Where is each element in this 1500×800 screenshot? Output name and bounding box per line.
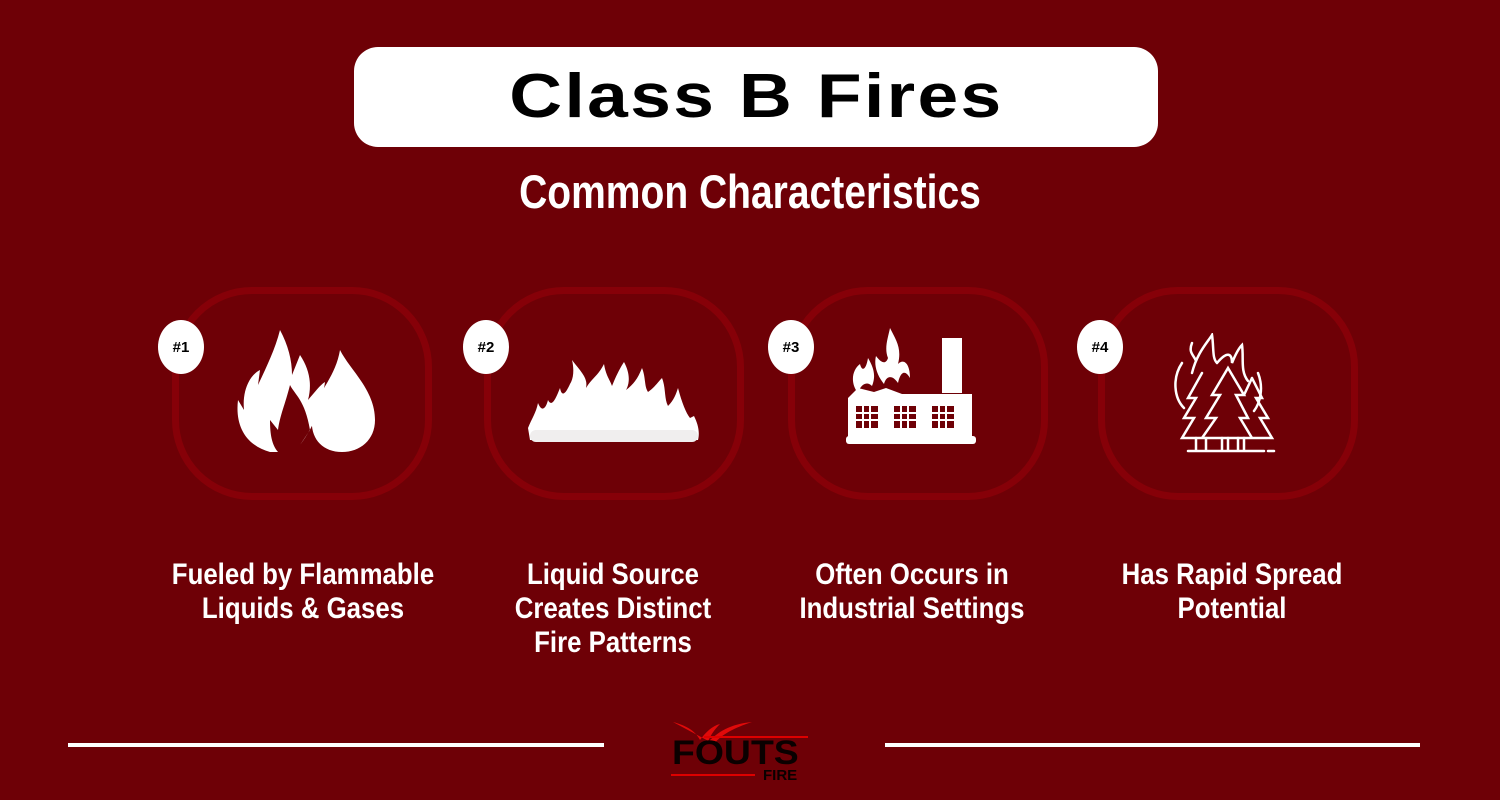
label 1: Liquids & Gases — [202, 592, 404, 625]
label 3: Industrial Settings — [799, 592, 1025, 625]
icon: liquid fire — [528, 360, 699, 442]
logo: FOUTS — [672, 734, 799, 772]
badge 3: #3 — [783, 338, 799, 356]
icon: flame and drop — [238, 330, 375, 452]
badge 2 — [463, 320, 509, 374]
label 2: Liquid Source — [527, 558, 699, 591]
label 3 — [799, 558, 1025, 625]
label 1: Fueled by Flammable — [172, 558, 434, 591]
badge 1: #1 — [173, 338, 189, 356]
label 3: Often Occurs in — [815, 558, 1009, 591]
logo: FIRE — [763, 767, 797, 784]
badge 4 — [1077, 320, 1123, 374]
card 1 — [172, 287, 432, 500]
footer line left — [68, 743, 604, 747]
icon: factory on fire — [846, 328, 976, 444]
footer line right — [885, 743, 1420, 747]
label 2 — [515, 558, 711, 659]
badge 2: #2 — [478, 338, 494, 356]
card 4 — [1098, 287, 1358, 500]
card 3 — [788, 287, 1048, 500]
label 2: Fire Patterns — [534, 626, 692, 659]
subtitle: Common Characteristics — [519, 165, 981, 218]
title box — [354, 47, 1158, 147]
label 4: Has Rapid Spread — [1122, 558, 1342, 591]
badge 4: #4 — [1092, 338, 1108, 356]
badge 1 — [158, 320, 204, 374]
card 2 — [484, 287, 744, 500]
icon: forest fire — [1174, 333, 1276, 452]
badge 3 — [768, 320, 814, 374]
logo — [671, 722, 808, 784]
label 4 — [1122, 558, 1342, 625]
label 1 — [172, 558, 434, 625]
label 2: Creates Distinct — [515, 592, 711, 625]
label 4: Potential — [1178, 592, 1286, 625]
title text: Class B Fires — [509, 62, 1003, 131]
